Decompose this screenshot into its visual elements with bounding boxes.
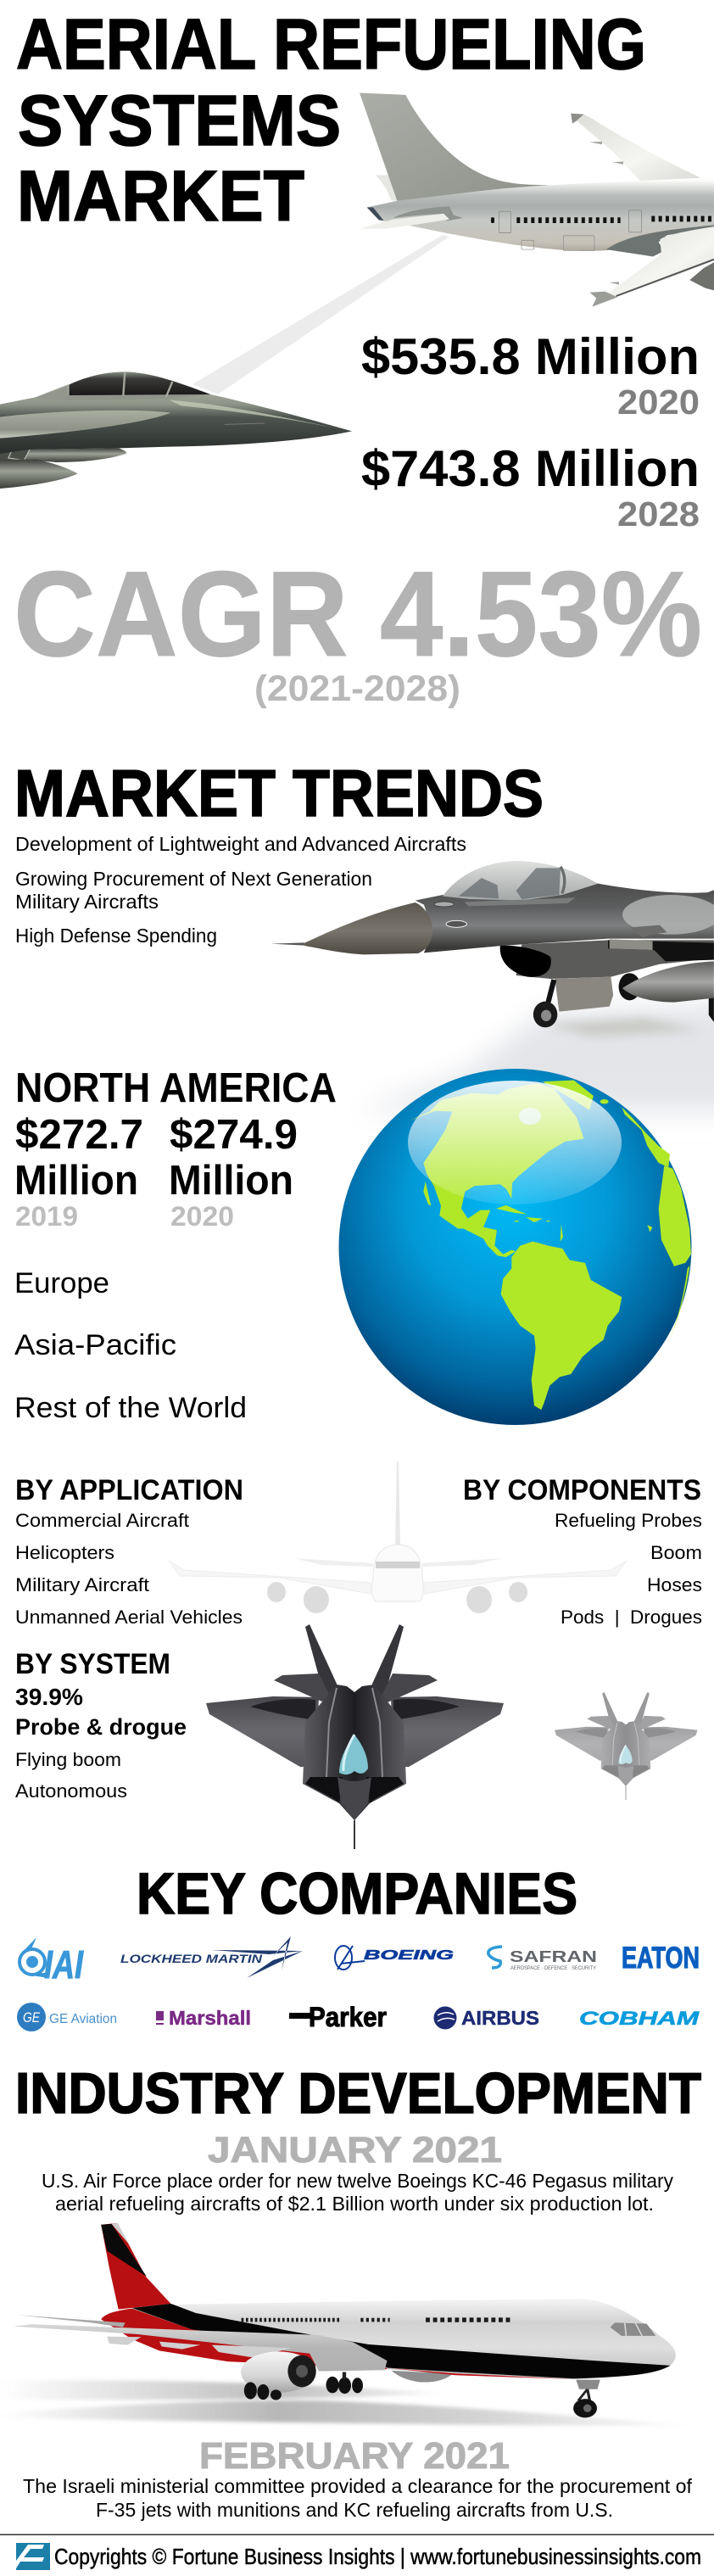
segment: by system: BY SYSTEM (15, 1648, 170, 1680)
white airliner front view (169, 1461, 627, 1613)
refueling boom beam (192, 235, 449, 394)
title (16, 4, 646, 236)
segment: by application: BY APPLICATION (15, 1474, 243, 1506)
logo: Safran: SAFRAN (510, 1948, 597, 1965)
other regions (14, 1267, 247, 1424)
segment: by system: Autonomous (15, 1780, 127, 1802)
trend list: Military Aircrafts (15, 891, 159, 913)
globe highlight (408, 1081, 622, 1204)
logo: Lockheed Martin: LOCKHEED MARTIN (120, 1952, 263, 1965)
February development panel (23, 2435, 693, 2521)
other regions: Rest of the World (14, 1392, 247, 1424)
market trends panel (14, 756, 544, 947)
grey stealth jet (555, 1692, 697, 1800)
logo: Airbus: AIRBUS (461, 2007, 539, 2029)
segment: by system: Flying boom (15, 1749, 121, 1770)
segment: by components: BY COMPONENTS (463, 1474, 701, 1506)
date: January 2021: JANUARY 2021 (208, 2130, 502, 2171)
segment: by system: 39.9% (15, 1684, 83, 1710)
value 2020 (169, 1112, 298, 1232)
segment: by application: Helicopters (15, 1542, 114, 1563)
January development text: aerial refueling aircrafts of $2.1 Billion worth under six production lot. (55, 2193, 654, 2215)
logo: Cobham: COBHAM (579, 2008, 700, 2029)
great lakes and Hudson Bay (519, 1108, 541, 1125)
logo: Boeing: BOEING (364, 1948, 454, 1963)
logo: Boeing (335, 1946, 454, 1970)
value 2019: Million (14, 1158, 138, 1204)
other regions: Asia-Pacific (14, 1329, 176, 1361)
heading: key companies: KEY COMPANIES (137, 1861, 577, 1926)
company logos (17, 1936, 700, 2032)
region: north america (14, 1065, 337, 1232)
value 2020: 2020 (170, 1201, 234, 1232)
segment: by application: Unmanned Aerial Vehicles (15, 1607, 243, 1628)
fighter jet illustration (0, 372, 352, 489)
continents (410, 1080, 691, 1410)
January development text: U.S. Air Force place order for new twelve Boeings KC-46 Pegasus military (42, 2170, 673, 2192)
logo: GE Aviation: GE (23, 2009, 41, 2026)
logo: GE Aviation (17, 2003, 117, 2031)
icon: Fortune Business Insights logo (16, 2543, 50, 2570)
logo: Lockheed Martin (120, 1936, 303, 1978)
segment: by components: Refueling Probes (555, 1510, 702, 1531)
segment: by system (15, 1648, 187, 1802)
trend list: Growing Procurement of Next Generation (15, 868, 372, 890)
segment: by components: Boom (650, 1542, 702, 1563)
trend list (15, 833, 466, 947)
value 2019 (14, 1112, 143, 1232)
globe illustration (339, 1069, 692, 1425)
January development text (42, 2170, 673, 2215)
heading: market trends: MARKET TRENDS (14, 756, 544, 830)
segment: by system: Probe & drogue (15, 1714, 187, 1740)
segment: by application: Commercial Aircraft (15, 1510, 189, 1531)
segment: by components (463, 1474, 702, 1628)
value 2019: $272.7 (15, 1112, 143, 1158)
logo: Safran (488, 1947, 597, 1971)
title: MARKET (17, 156, 304, 236)
logo: IAI (20, 1937, 84, 1986)
floor reflection under jet (356, 1001, 714, 1111)
CAGR callout: (2021-2028) (254, 668, 460, 709)
market value 2028 (361, 440, 700, 534)
title: AERIAL REFUELING (16, 4, 646, 84)
logo: Parker: Parker (309, 2002, 387, 2032)
February development text: The Israeli ministerial committee provided a clearance for the procurement of (23, 2475, 693, 2497)
region: north america: NORTH AMERICA (15, 1065, 337, 1111)
trend list: Development of Lightweight and Advanced Aircrafts (15, 833, 466, 855)
value 2020: $274.9 (170, 1112, 298, 1158)
date: February 2021: FEBRUARY 2021 (199, 2435, 510, 2477)
footer (16, 2543, 701, 2570)
logo: Airbus (434, 2007, 539, 2029)
logo: Marshall: Marshall (169, 2007, 251, 2029)
logo: Safran: AEROSPACE · DEFENCE · SECURITY (510, 1966, 596, 1971)
market value 2020: 2020 (617, 383, 700, 422)
logo: IAI: IAI (44, 1942, 84, 1986)
February development text: F-35 jets with munitions and KC refueling aircrafts from U.S. (96, 2499, 613, 2521)
trend list: High Defense Spending (15, 925, 217, 947)
segment: by components: Pods | Drogues (561, 1607, 702, 1628)
tanker aircraft illustration (359, 92, 714, 307)
market value 2020 (361, 328, 700, 422)
F-16 fighter illustration (271, 861, 714, 1027)
dark stealth jet (206, 1624, 504, 1849)
industry development panel (15, 2061, 701, 2215)
red and black airliner illustration (0, 2223, 697, 2426)
segment: by application: Military Aircraft (15, 1574, 149, 1595)
market value 2028: $743.8 Million (361, 440, 700, 497)
other regions: Europe (14, 1267, 109, 1299)
segment: by components: Hoses (647, 1574, 702, 1595)
value 2019: 2019 (15, 1201, 78, 1232)
title: SYSTEMS (18, 81, 341, 160)
segment: by application (15, 1474, 243, 1628)
market value 2020: $535.8 Million (361, 328, 700, 385)
February development text (23, 2475, 693, 2521)
value 2020: Million (169, 1158, 293, 1204)
market value 2028: 2028 (617, 495, 700, 534)
logo: GE Aviation: GE Aviation (49, 2012, 117, 2026)
